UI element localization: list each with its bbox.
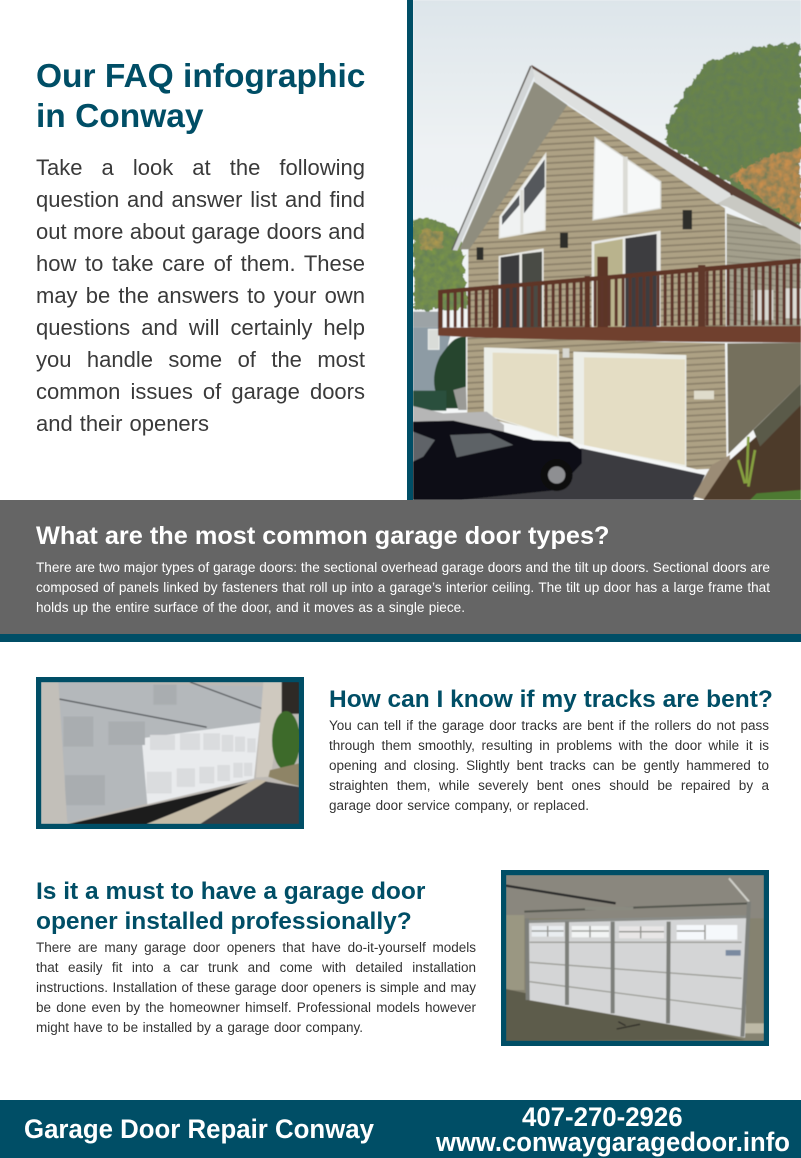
panel: intro <box>36 58 365 436</box>
lower windows <box>499 248 544 333</box>
body text: opening and closing. Slightly bent tracks can be gently hammered to <box>329 758 769 773</box>
posts <box>438 290 442 335</box>
slope <box>703 397 801 500</box>
intro paragraph: may be the answers to your own <box>36 283 365 308</box>
cars <box>413 406 504 433</box>
heading: opener installed professionally? <box>36 908 412 935</box>
website: www.conwaygaragedoor.info <box>436 1127 790 1157</box>
body text: through them smoothly, resulting in problems with the door while it is <box>329 738 769 753</box>
heading: Is it a must to have a garage door <box>36 878 425 905</box>
body text <box>36 940 476 1035</box>
intro paragraph: questions and will certainly help <box>36 315 365 340</box>
top rail <box>438 258 801 294</box>
upper windows <box>593 138 661 220</box>
lower wall <box>467 337 727 469</box>
trees <box>413 43 801 310</box>
vertical divider bar <box>407 0 413 500</box>
intro paragraph: and their openers <box>36 411 209 436</box>
walls upper <box>468 105 726 337</box>
panel: professional opener installation <box>36 870 769 1046</box>
body text: composed of panels linked by fasteners that roll up into a garage’s interior ceiling. The tilt up door has a large frame that <box>36 580 770 595</box>
balusters <box>441 263 801 327</box>
photo: interior garage door <box>501 870 769 1046</box>
body text <box>329 718 769 813</box>
footer band <box>0 1100 801 1158</box>
body text: instructions. Installation of these garage door openers is simple and may <box>36 980 476 995</box>
heading: How can I know if my tracks are bent? <box>329 686 773 713</box>
title <box>36 58 365 135</box>
photo: house with two garage doors <box>413 0 801 500</box>
soffit <box>459 82 567 249</box>
body text: might have to be installed by a garage door company. <box>36 1020 363 1035</box>
garage doors <box>484 347 559 438</box>
body text: that easily fit into a car trunk and come with detailed installation <box>36 960 476 975</box>
body text: holds up the entire surface of the door, and it moves as a single piece. <box>36 600 465 615</box>
body text: You can tell if the garage door tracks are bent if the rollers do not pass <box>329 718 769 733</box>
intro paragraph <box>36 155 365 436</box>
bottom stripe <box>0 634 801 642</box>
roof <box>452 65 801 250</box>
body text: straighten them, while severely bent ones should be repaired by a <box>329 778 769 793</box>
fascia <box>452 66 535 251</box>
edge stones <box>693 455 730 500</box>
photo: bent garage door <box>36 677 304 829</box>
intro paragraph: how to take care of them. These <box>36 251 365 276</box>
intro paragraph: you handle some of the most <box>36 347 365 372</box>
panel: common garage door types <box>0 500 801 642</box>
deck beam <box>438 326 801 343</box>
heading: What are the most common garage door types? <box>36 522 610 550</box>
body text: There are two major types of garage doors: the sectional overhead garage doors and the tilt up doors. Sectional doors are <box>36 560 770 575</box>
title: in Conway <box>36 98 204 135</box>
intro paragraph: common issues of garage doors <box>36 379 365 404</box>
intro paragraph: question and answer list and find <box>36 187 365 212</box>
body text <box>36 560 770 615</box>
phone number: 407-270-2926 <box>522 1102 683 1132</box>
panel: bent tracks <box>36 677 773 829</box>
body text: There are many garage door openers that have do-it-yourself models <box>36 940 476 955</box>
lamps <box>477 247 483 260</box>
patio furniture glimpse <box>753 290 773 320</box>
footer company name: Garage Door Repair Conway <box>24 1114 374 1144</box>
intro paragraph: out more about garage doors and <box>36 219 365 244</box>
driveway <box>413 448 705 500</box>
heading <box>36 878 426 935</box>
neighbour house <box>413 312 438 327</box>
body text: be done even by the homeowner himself. Professional models however <box>36 1000 476 1015</box>
title: Our FAQ infographic <box>36 58 365 95</box>
body text: garage door service company, or replaced. <box>329 798 589 813</box>
intro paragraph: Take a look at the following <box>36 155 365 180</box>
